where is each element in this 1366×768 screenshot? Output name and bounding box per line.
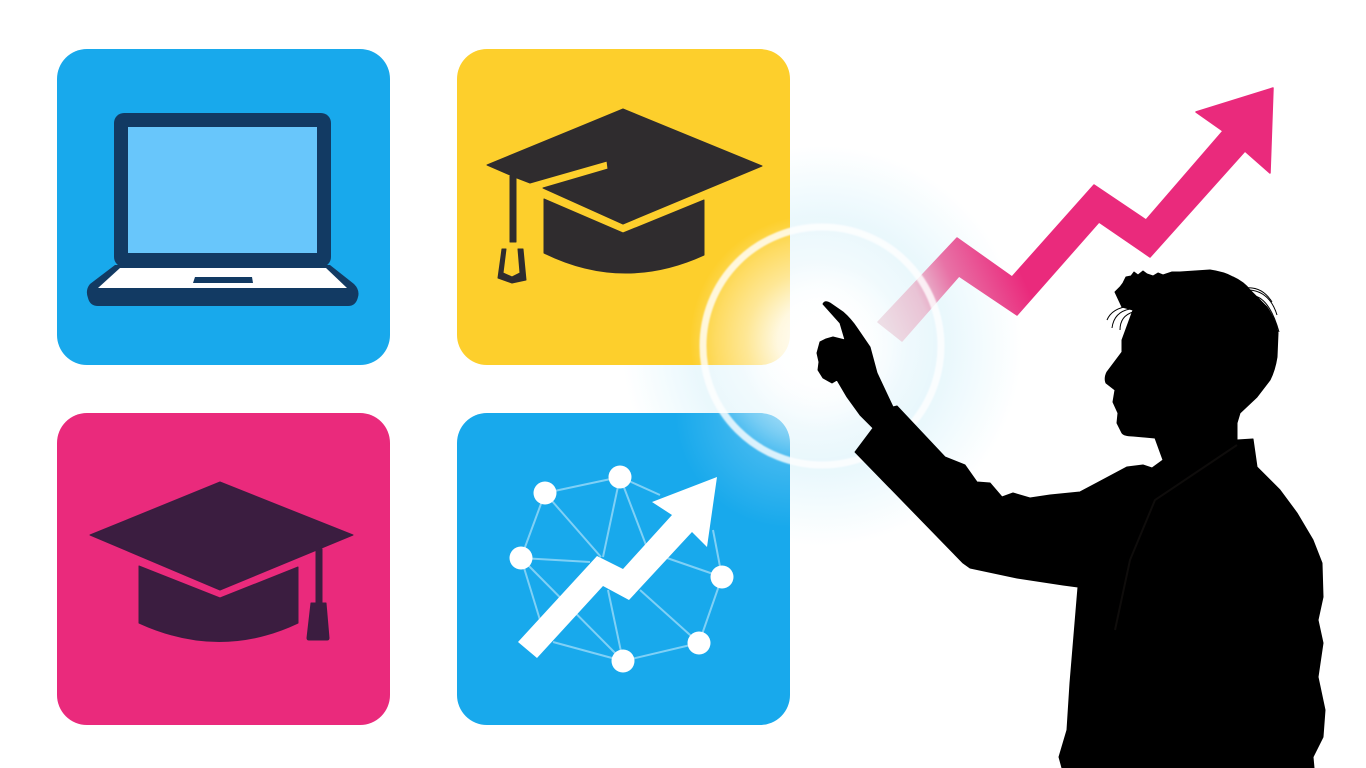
glowing ring — [703, 227, 941, 465]
panel: yellow graduation cap tile — [457, 49, 790, 365]
panel: laptop tile — [57, 49, 390, 365]
panel: pink graduation cap tile — [57, 413, 390, 725]
icon: graduation cap with tassel — [487, 109, 762, 283]
hair strands — [1107, 288, 1279, 332]
icon: network nodes — [510, 466, 734, 672]
panel: network growth tile — [457, 413, 790, 725]
silhouette: person pointing — [817, 270, 1325, 768]
white light bloom over tiles — [690, 215, 940, 465]
icon: laptop — [87, 113, 358, 306]
icon: white rising arrow — [518, 477, 717, 658]
icon: network links — [521, 477, 722, 661]
icon: graduation cap — [90, 482, 353, 642]
arrow: pink rising trend — [878, 88, 1273, 341]
light blue glow behind the hand — [622, 146, 1022, 546]
jacket lapel shading — [1115, 445, 1237, 630]
